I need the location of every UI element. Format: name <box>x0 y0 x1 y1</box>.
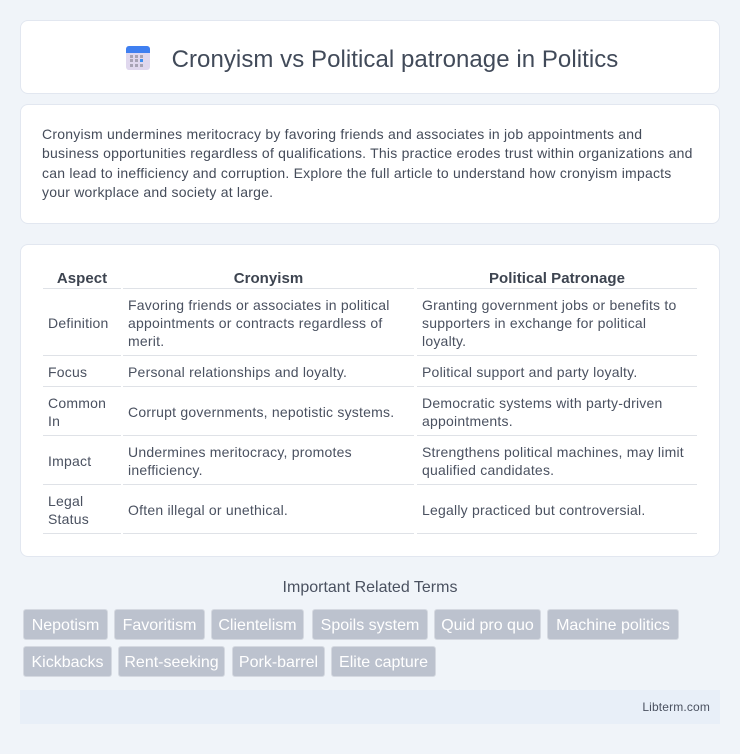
related term tags: Machine politics <box>556 617 670 634</box>
related term tags: Kickbacks <box>31 654 104 671</box>
row: legal status: Legal <box>48 493 83 509</box>
table header <box>57 270 625 287</box>
source credit: Libterm.com <box>642 700 710 714</box>
related term tags: Spoils system <box>321 617 419 634</box>
row: common in: In <box>48 413 60 429</box>
related term tags: Nepotism <box>32 617 99 634</box>
intro text <box>42 126 693 200</box>
row: legal status: Often illegal or unethical. <box>128 502 288 518</box>
row: definition <box>48 297 676 349</box>
row: impact: Strengthens political machines, may limit <box>422 444 684 460</box>
row: common in: Democratic systems with party-driven <box>422 395 663 411</box>
row: legal status: Status <box>48 511 89 527</box>
row: impact: Impact <box>48 453 91 469</box>
table header: Aspect <box>57 270 107 287</box>
related term tags: Quid pro quo <box>441 617 534 634</box>
row: definition: loyalty. <box>422 333 466 349</box>
table panel <box>20 244 720 557</box>
row: focus <box>48 364 637 380</box>
intro text: business opportunities regardless of qualifications. This practice erodes trust within organizations and <box>42 145 693 161</box>
row: common in <box>48 395 663 429</box>
row: definition: Definition <box>48 315 109 331</box>
row: impact: Undermines meritocracy, promotes <box>128 444 352 460</box>
related terms heading: Important Related Terms <box>283 579 457 596</box>
related term tags: Rent-seeking <box>124 654 219 671</box>
header panel <box>20 20 720 94</box>
table header: Cronyism <box>234 270 303 287</box>
icon: calendar <box>126 46 150 70</box>
intro text: can lead to inefficiency and corruption. Explore the full article to understand how cronyism impacts <box>42 165 672 181</box>
comparison table <box>43 270 697 534</box>
row: common in: Common <box>48 395 106 411</box>
footer bar <box>20 690 720 724</box>
intro panel <box>20 104 720 224</box>
row: definition: Granting government jobs or benefits to <box>422 297 676 313</box>
row: definition: merit. <box>128 333 164 349</box>
related term tags <box>23 609 679 677</box>
row: impact: inefficiency. <box>128 462 203 478</box>
row: focus: Personal relationships and loyalty. <box>128 364 347 380</box>
related term tags: Favoritism <box>123 617 196 634</box>
row: focus: Focus <box>48 364 87 380</box>
row: legal status <box>48 493 645 527</box>
row: common in: appointments. <box>422 413 513 429</box>
table header: Political Patronage <box>489 270 625 287</box>
related term tags: Clientelism <box>218 617 297 634</box>
row: focus: Political support and party loyalty. <box>422 364 637 380</box>
row: common in: Corrupt governments, nepotistic systems. <box>128 404 394 420</box>
related term tags: Elite capture <box>339 654 428 671</box>
related term tags: Pork-barrel <box>239 654 318 671</box>
intro text: your workplace and society at large. <box>42 184 273 200</box>
title: Cronyism vs Political patronage in Politics <box>172 46 618 73</box>
row: definition: supporters in exchange for political <box>422 315 646 331</box>
intro text: Cronyism undermines meritocracy by favoring friends and associates in job appointments and <box>42 126 642 142</box>
row: definition: Favoring friends or associates in political <box>128 297 390 313</box>
row: definition: appointments or contracts regardless of <box>128 315 382 331</box>
row: legal status: Legally practiced but controversial. <box>422 502 645 518</box>
row: impact <box>48 444 684 478</box>
row: impact: qualified candidates. <box>422 462 554 478</box>
